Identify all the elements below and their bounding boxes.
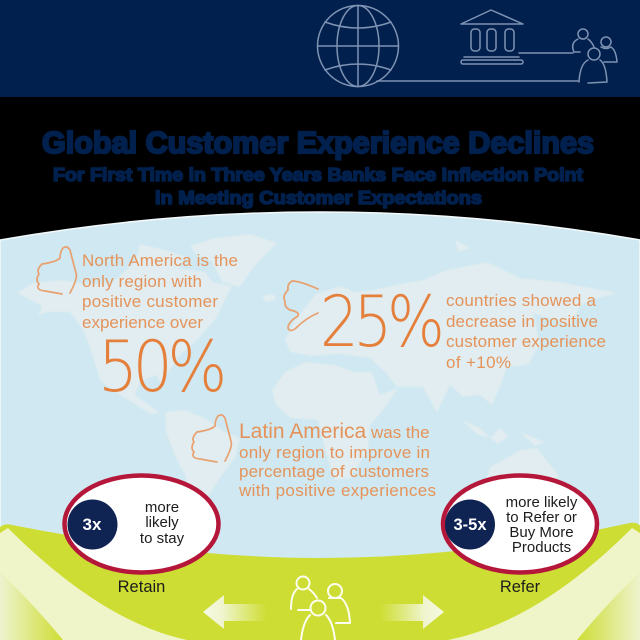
arrow: right: [380, 595, 444, 629]
Africa: [272, 362, 398, 480]
left curved band: [0, 528, 187, 640]
title: Global Customer Experience Declines: [42, 125, 594, 160]
label: retain: Retain: [118, 578, 165, 596]
connector lines: [377, 53, 578, 81]
header band: [0, 0, 640, 97]
arrow: left: [203, 595, 267, 629]
icon: globe: [318, 6, 398, 86]
text: countries decrease: customer experience: [446, 332, 606, 351]
Iceland: [262, 294, 276, 302]
Australia: [487, 448, 560, 500]
text: more likely to stay: likely: [145, 514, 179, 531]
text: latin america: Latin America was the: [239, 420, 430, 443]
text: latin america: with positive experiences: [238, 481, 436, 500]
Europe and Asia: [285, 262, 617, 413]
subtitle: [53, 165, 583, 208]
North America: [17, 244, 232, 414]
badge: 3-5x: 3-5x: [453, 516, 487, 534]
icon: bank: [461, 10, 523, 64]
stat: 25 percent: 25%: [320, 282, 441, 363]
text: more likely to refer: more likely: [506, 494, 578, 511]
world map: [17, 234, 617, 510]
text: north america: [82, 251, 238, 332]
right curved band: [448, 528, 640, 640]
Indonesia and Japan: [455, 240, 545, 446]
callout: refer oval: [443, 476, 597, 572]
text: more likely to stay: to stay: [140, 530, 185, 547]
icon: thumb up north america: [37, 247, 76, 294]
icon: people group: [291, 576, 350, 640]
text: countries decrease: decrease in positive: [446, 312, 598, 331]
text: more likely to stay: more: [145, 499, 179, 516]
text: countries decrease: of +10%: [446, 353, 511, 372]
text: north america: only region with: [82, 272, 202, 291]
green hill: [0, 523, 640, 640]
label: refer: Refer: [500, 578, 541, 596]
South America: [165, 410, 240, 510]
icon: people: [573, 29, 617, 83]
text: more likely to stay: [140, 499, 185, 547]
text: north america: experience over: [82, 313, 203, 332]
Greenland: [190, 234, 277, 287]
text: latin america: percentage of customers: [239, 462, 429, 481]
badge: 3-5x: [445, 500, 495, 550]
subtitle: For First Time in Three Years Banks Face Inflection Point: [53, 165, 583, 185]
badge: 3x: [68, 500, 118, 550]
icon: thumb down: [284, 281, 318, 330]
text: north america: positive customer: [82, 292, 218, 311]
text: more likely to refer: Products: [512, 539, 571, 556]
icon: thumb up latin america: [192, 415, 231, 462]
text: more likely to refer: Buy More: [509, 524, 574, 541]
subtitle: in Meeting Customer Expectations: [155, 188, 482, 208]
text: countries decrease: countries showed a: [446, 291, 597, 310]
text: more likely to refer: to Refer or: [506, 509, 577, 526]
text: latin america: only region to improve in: [239, 443, 430, 462]
badge: 3x: 3x: [83, 515, 102, 534]
text: latin america: [238, 420, 436, 500]
text: countries decrease: [446, 291, 606, 372]
sky globe background: [0, 212, 640, 640]
stat: 50 percent: 50%: [98, 326, 223, 408]
callout: retain oval: [64, 476, 218, 572]
text: more likely to refer: [506, 494, 578, 556]
text: north america: North America is the: [82, 251, 238, 270]
